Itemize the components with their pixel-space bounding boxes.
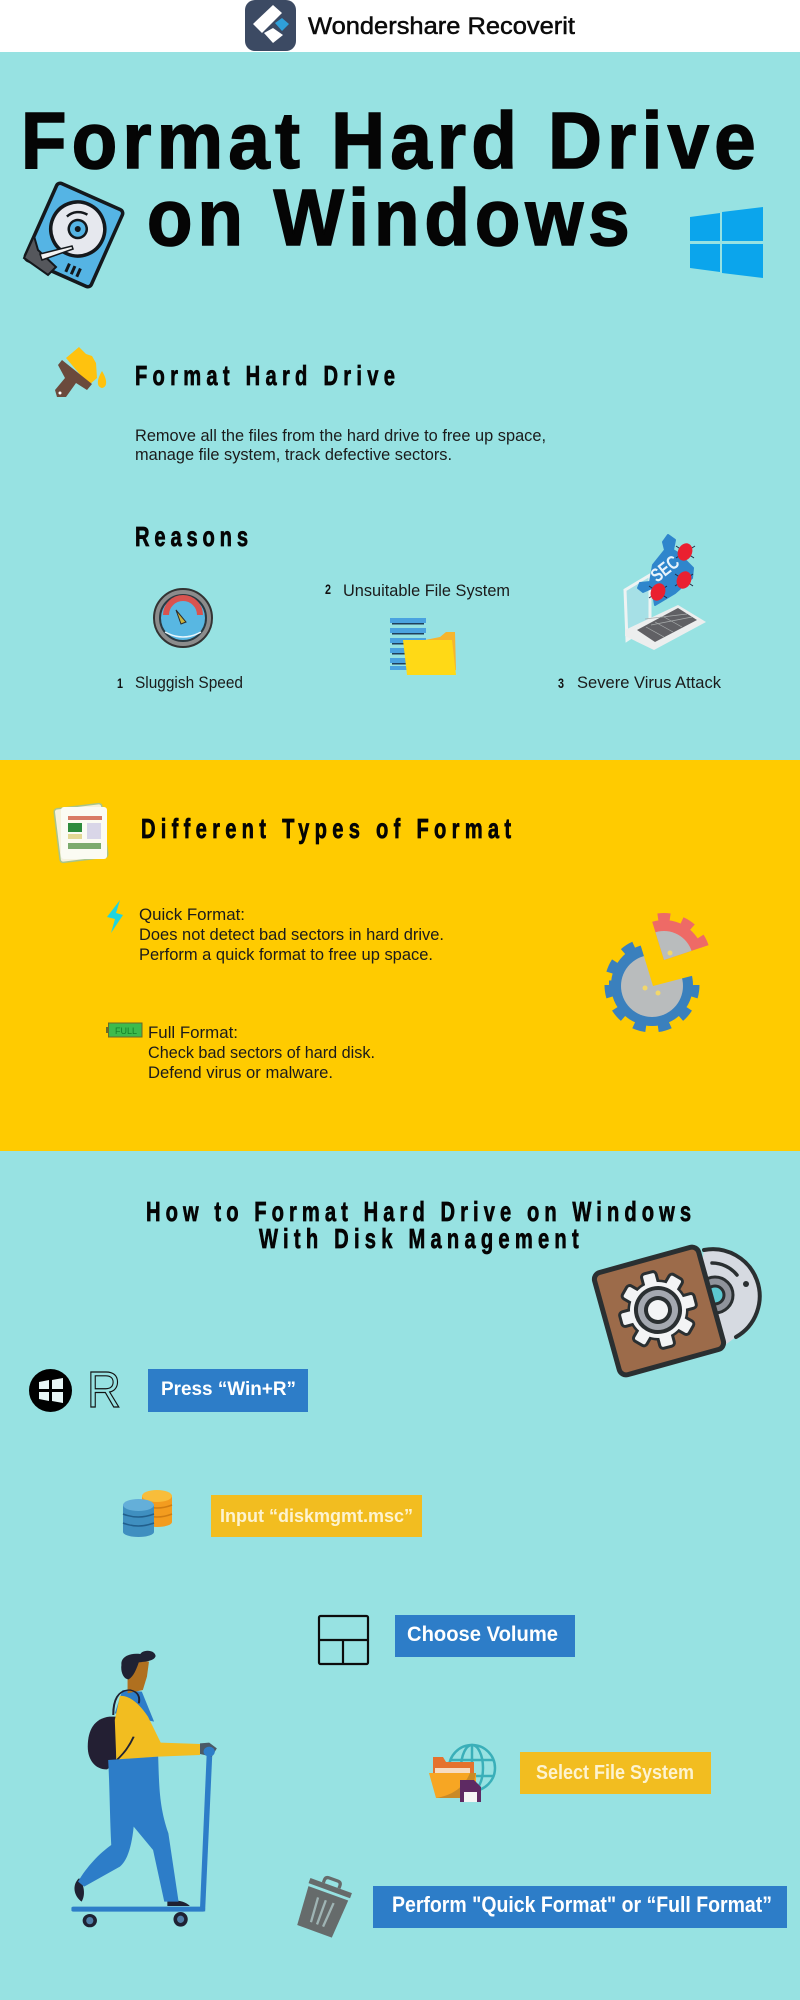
- reason 2: 2: [325, 581, 331, 597]
- title: Format Hard Drive: [21, 97, 756, 186]
- icon: trash can: [294, 1872, 354, 1939]
- icon: Wondershare logo: [245, 0, 296, 51]
- icon: full battery: [106, 1023, 142, 1037]
- step: Select File System: [520, 1752, 711, 1794]
- icon: split gear: [609, 917, 722, 1028]
- reason 1: Sluggish Speed: [135, 673, 243, 692]
- icon: R key: R: [87, 1361, 121, 1418]
- step: Press Win+R: Press “Win+R”: [161, 1379, 296, 1400]
- heading: Reasons: Reasons: [135, 522, 248, 553]
- reason 3: Severe Virus Attack: [577, 673, 721, 692]
- text: full format: Check bad sectors of hard disk.: [148, 1043, 375, 1062]
- heading: how to format: [146, 1197, 691, 1255]
- icon: database stacks: [123, 1490, 172, 1537]
- heading: how to format: How to Format Hard Drive on Windows: [146, 1197, 691, 1228]
- icon: hard drive: [24, 182, 124, 288]
- text: quick format: Perform a quick format to free up space.: [139, 945, 433, 964]
- step: Choose Volume: [395, 1615, 575, 1657]
- text: definition: [135, 426, 546, 464]
- title: [21, 97, 756, 263]
- text: full format: Defend virus or malware.: [148, 1063, 333, 1082]
- icon: virus attack on laptop: SEC: [647, 552, 684, 587]
- step: Choose Volume: Choose Volume: [407, 1623, 558, 1646]
- title: on Windows: [147, 174, 630, 263]
- icon: paint brush: [55, 347, 106, 397]
- reason 2: Unsuitable File System: [343, 581, 510, 600]
- heading: how to format: With Disk Management: [259, 1224, 579, 1255]
- heading: Format Hard Drive: Format Hard Drive: [135, 361, 395, 392]
- text: quick format: Quick Format:: [139, 905, 245, 924]
- panel: header: [0, 0, 800, 52]
- text: definition: manage file system, track defective sectors.: [135, 445, 452, 464]
- icon: file folder: [390, 618, 456, 675]
- step: Input diskmgmt.msc: Input “diskmgmt.msc”: [220, 1506, 413, 1526]
- illustration: person on scooter: [71, 1651, 217, 1927]
- icon: folder, globe and floppy: [429, 1745, 495, 1802]
- reason 3: 3: [558, 675, 564, 691]
- step: Select File System: Select File System: [536, 1762, 694, 1784]
- heading: Different Types of Format: Different Types of Format: [141, 814, 511, 845]
- icon: full battery: FULL: [115, 1026, 137, 1036]
- icon: disk with gear: [593, 1245, 760, 1377]
- icon: lightning bolt: [107, 900, 123, 933]
- step: Press Win+R: [148, 1369, 308, 1412]
- icon: Windows key: [29, 1369, 72, 1412]
- brand name: Wondershare Recoverit: [308, 13, 575, 40]
- text: quick format: [139, 905, 444, 964]
- text: definition: Remove all the files from the hard drive to free up space,: [135, 426, 546, 445]
- text: quick format: Does not detect bad sectors in hard drive.: [139, 925, 444, 944]
- step: Perform Quick or Full Format: [373, 1886, 787, 1928]
- reason 1: 1: [117, 675, 123, 691]
- icon: speed gauge: [154, 589, 212, 647]
- icon: volume layout: [319, 1616, 368, 1664]
- icon: Windows logo: [690, 207, 763, 278]
- panel: different types of format: [0, 760, 800, 1151]
- text: full format: Full Format:: [148, 1023, 238, 1042]
- icon: document pages: [54, 803, 108, 863]
- text: full format: [148, 1023, 375, 1082]
- icon: virus attack on laptop: [625, 535, 706, 650]
- step: Input diskmgmt.msc: [211, 1495, 422, 1537]
